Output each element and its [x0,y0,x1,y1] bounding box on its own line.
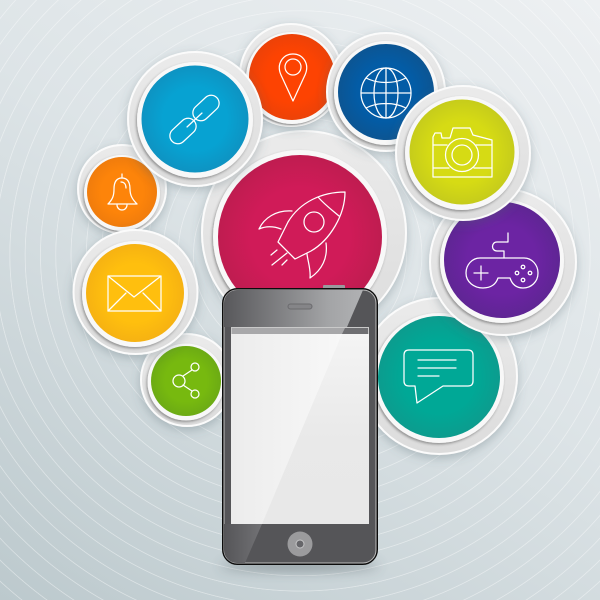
bubble: link [128,52,262,186]
bubble: game controller [430,189,576,335]
bubble: mail [74,230,198,354]
smartphone [222,285,378,564]
icon: rocket [259,192,345,278]
icon: map pin [279,54,307,101]
power button [323,285,345,289]
speaker [288,304,312,309]
icon: envelope [108,276,161,311]
bubble: location [240,24,342,126]
screen [231,334,369,524]
bubble: rocket [202,131,406,335]
icon: gamepad [466,233,538,288]
bubble: chat [361,298,517,454]
bubble: share [141,334,233,426]
icon: bell [108,174,137,210]
phone body [222,288,378,564]
bubble: bell [78,145,166,233]
icon: chain link [167,92,222,147]
bubble: camera [396,86,530,220]
screen header [232,328,368,334]
icon: camera [433,128,492,177]
icon: speech bubble [404,350,473,403]
bubble: globe [327,33,445,151]
home button [288,532,312,556]
illustration [68,22,582,578]
icon: globe [361,68,411,118]
phone shadow [220,561,380,571]
icon: share [173,363,199,398]
